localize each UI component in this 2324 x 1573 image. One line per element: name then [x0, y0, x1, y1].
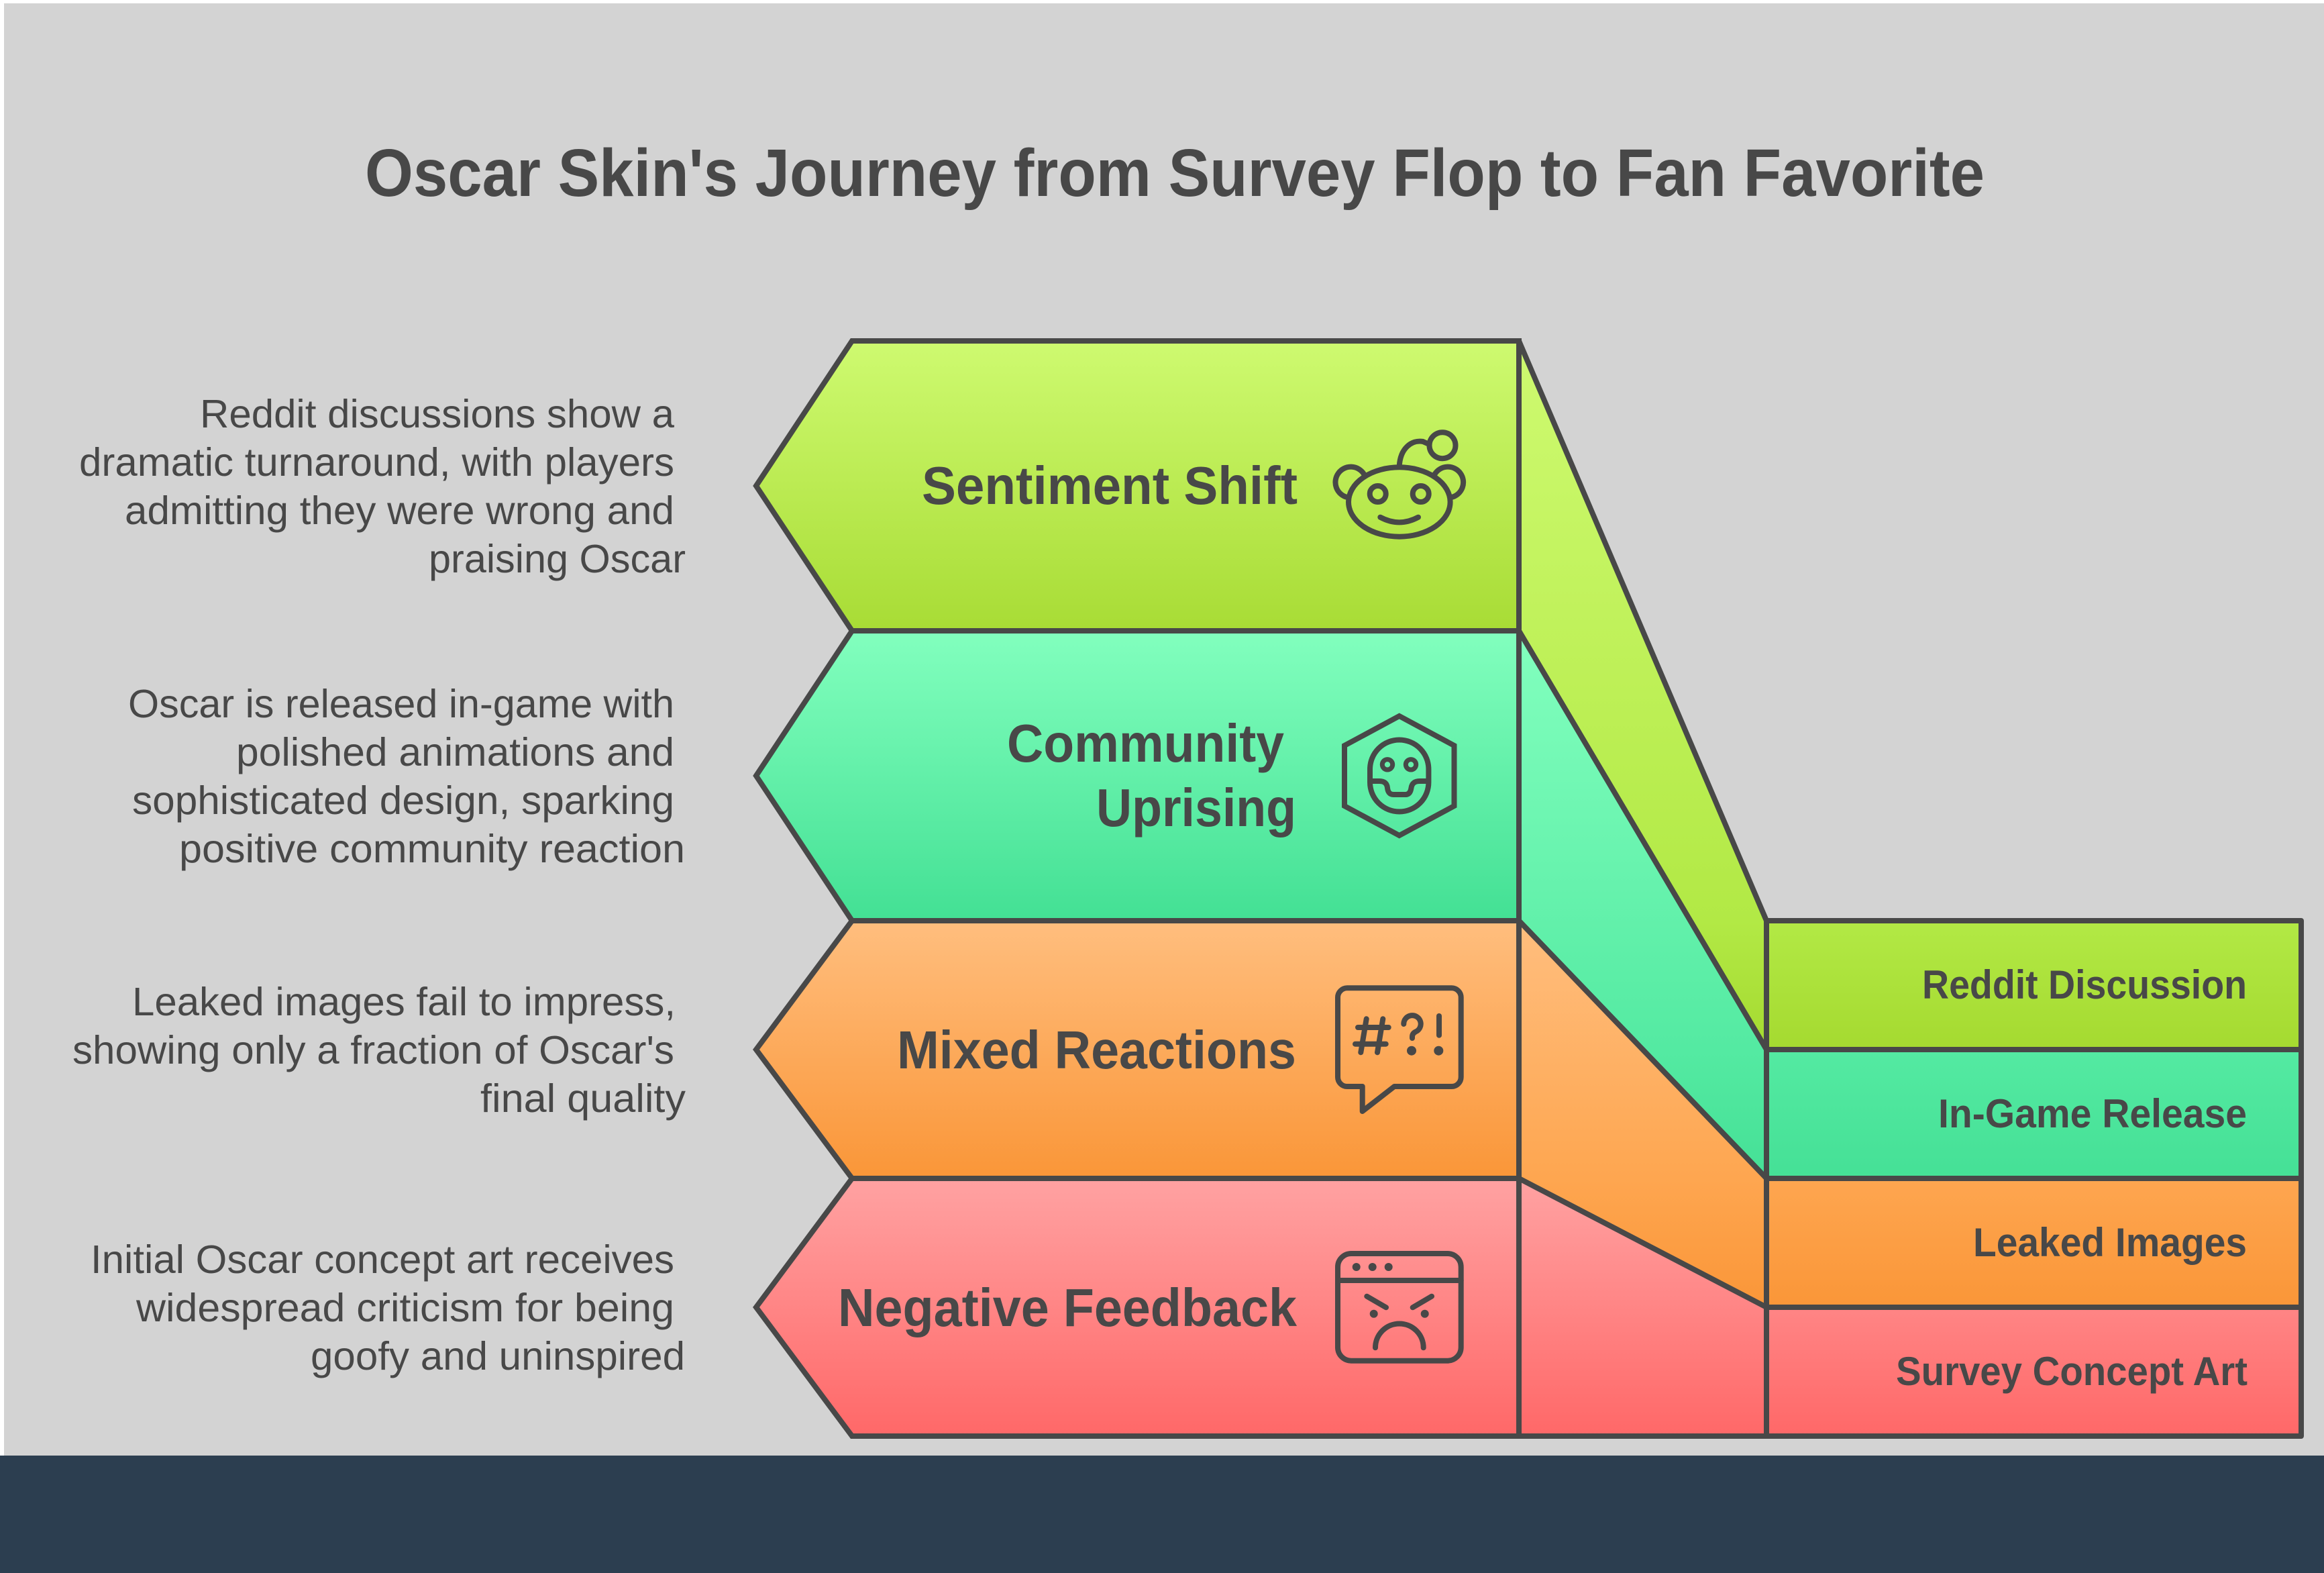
description: Community Uprising: Oscar is released in-game with [128, 682, 674, 726]
connector: red [1519, 1178, 1766, 1436]
description: Sentiment Shift: praising Oscar [429, 537, 686, 581]
heading [1007, 713, 1296, 838]
block: Survey Concept Art [1766, 1307, 2301, 1436]
connector: orange [1519, 921, 1766, 1307]
block: Reddit Discussion [1766, 921, 2301, 1050]
chevron panel [756, 1178, 1519, 1436]
connector: green [1519, 631, 1766, 1178]
block: Reddit Discussion: Reddit Discussion [1922, 962, 2247, 1007]
description: Mixed Reactions: showing only a fraction of Oscar's [72, 1028, 674, 1072]
icon: angry browser window [1338, 1254, 1461, 1361]
block: In-Game Release: In-Game Release [1938, 1091, 2247, 1136]
description: Sentiment Shift: Reddit discussions show a [200, 392, 674, 436]
description: Negative Feedback: goofy and uninspired [311, 1334, 685, 1378]
block: Survey Concept Art: Survey Concept Art [1896, 1349, 2248, 1394]
description: Mixed Reactions [72, 980, 686, 1121]
icon: hexagon skull face [1344, 716, 1455, 835]
description: Negative Feedback: widespread criticism for being [136, 1286, 674, 1330]
heading: Community [1007, 713, 1284, 773]
description: Negative Feedback [91, 1237, 685, 1378]
source blocks column [1766, 921, 2301, 1436]
stage: Sentiment Shift [756, 341, 1519, 631]
description: Mixed Reactions: final quality [480, 1076, 686, 1121]
block: In-Game Release [1766, 1050, 2301, 1178]
icon: reddit face [1335, 432, 1463, 537]
stage: Community Uprising [756, 631, 1519, 921]
description: Negative Feedback: Initial Oscar concept art receives [91, 1237, 674, 1282]
description: Mixed Reactions: Leaked images fail to impress, [132, 980, 676, 1024]
block: Leaked Images: Leaked Images [1973, 1220, 2247, 1265]
icon: speech bubble with symbols [1338, 988, 1461, 1111]
chevron panel [756, 631, 1519, 921]
description: Community Uprising: polished animations and [236, 730, 674, 774]
description: Sentiment Shift: admitting they were wrong and [125, 489, 674, 533]
description: Sentiment Shift: dramatic turnaround, with players [79, 440, 674, 485]
description: Community Uprising: positive community reaction [179, 827, 685, 871]
heading: Negative Feedback [838, 1278, 1297, 1337]
heading: Sentiment Shift [922, 456, 1298, 515]
description: Community Uprising [128, 682, 685, 871]
footer band [0, 1456, 2324, 1573]
heading: Mixed Reactions [897, 1020, 1296, 1080]
connector: lime [1519, 341, 1766, 1050]
description: Sentiment Shift [79, 392, 686, 581]
block: Leaked Images [1766, 1178, 2301, 1307]
stage: Mixed Reactions [756, 921, 1519, 1178]
chevron panel [756, 341, 1519, 631]
connector bands linking stages to sources [1519, 341, 1766, 1436]
heading: Uprising [1096, 778, 1296, 838]
stage: Negative Feedback [756, 1178, 1519, 1436]
description: Community Uprising: sophisticated design, sparking [132, 778, 674, 823]
chevron panel [756, 921, 1519, 1178]
title: Oscar Skin's Journey from Survey Flop to Fan Favorite [365, 136, 1985, 211]
